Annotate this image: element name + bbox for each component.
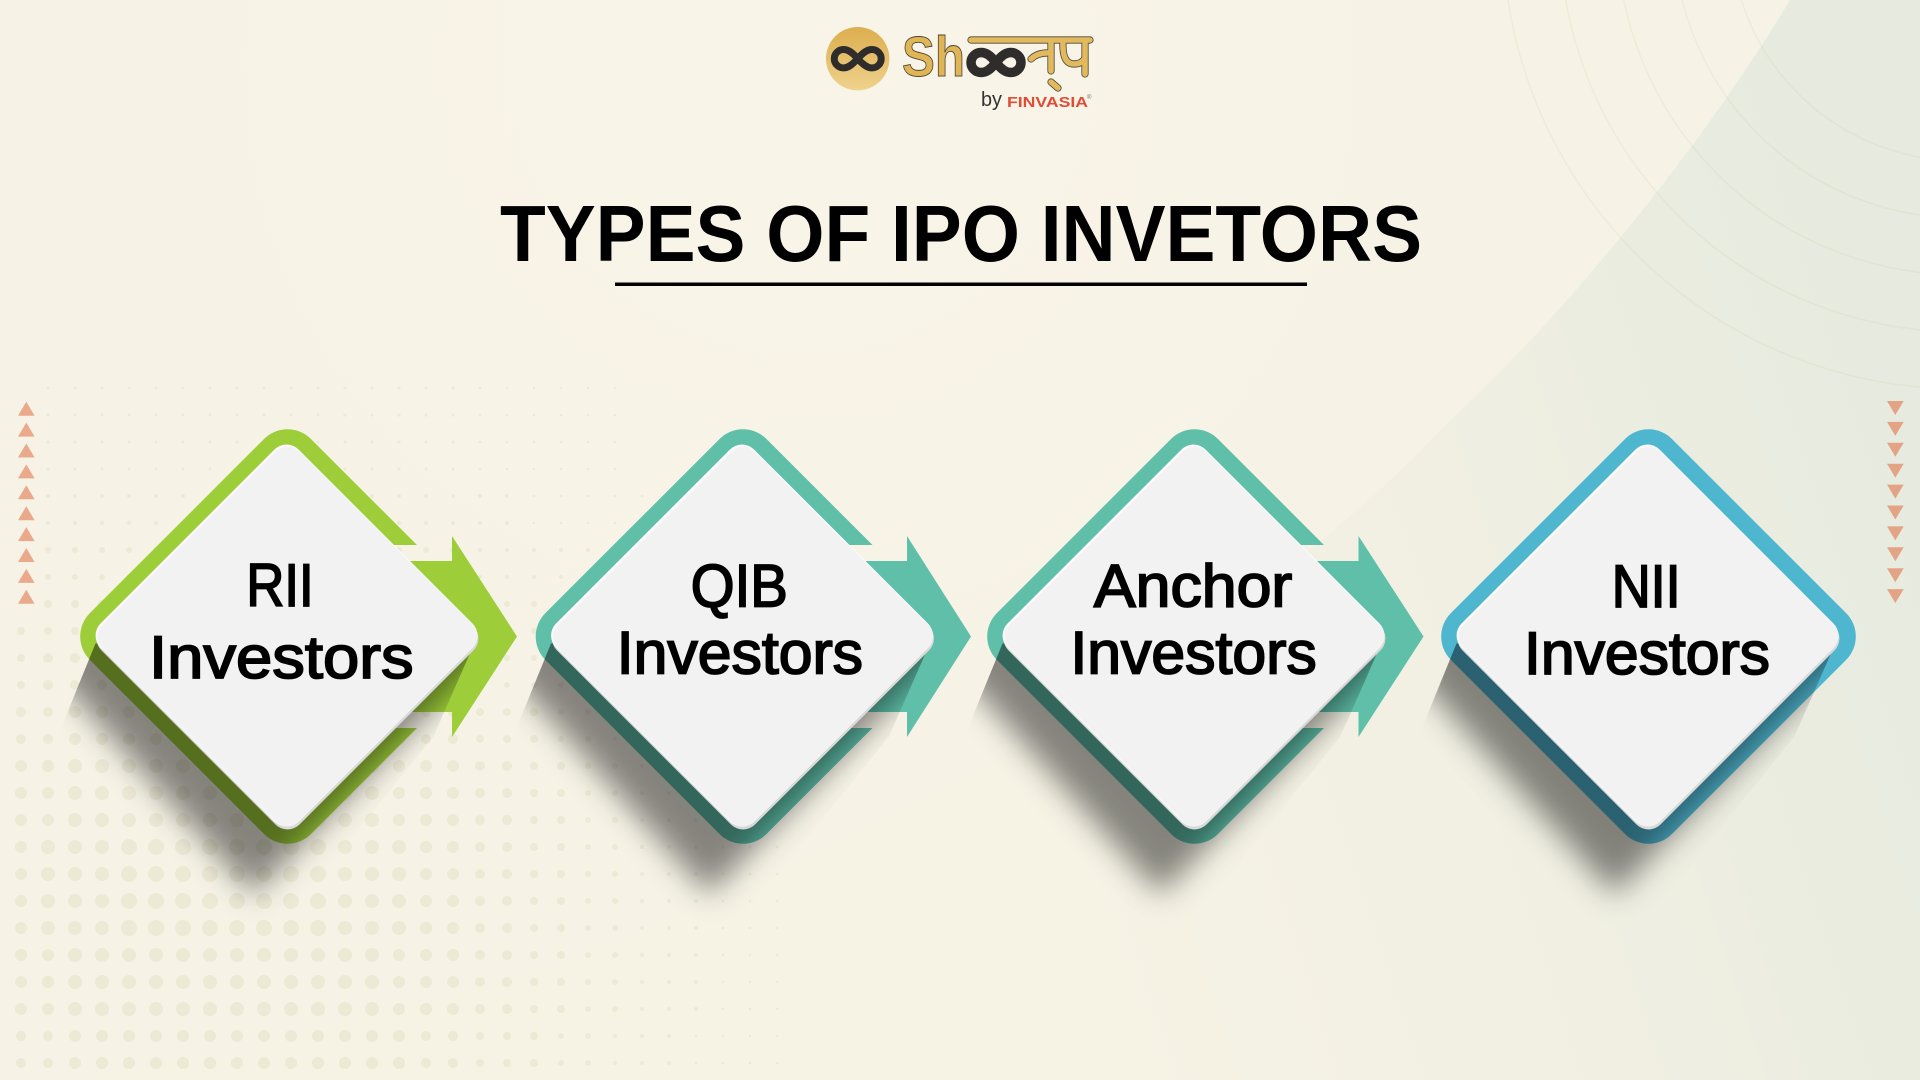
arrow: QIB to Anchor [843, 536, 971, 737]
icon: gold circle with infinity [826, 27, 889, 90]
ring [80, 429, 417, 844]
label: QIB: QIB [691, 552, 788, 620]
arrow: RII to QIB [388, 536, 517, 737]
shadow [66, 644, 470, 906]
label: Investors: Investors [1070, 620, 1317, 686]
panel: QIB investors [521, 429, 971, 906]
decorative up triangles [18, 402, 35, 604]
shadow [1426, 643, 1830, 906]
panel: RII investors [66, 429, 517, 906]
inner diamond [89, 438, 485, 836]
title: TYPES OF IPO INVETORS [500, 189, 1422, 278]
wordmark Sh: Sh [902, 25, 965, 89]
decorative down triangles [1887, 401, 1904, 603]
inner diamond [544, 438, 941, 836]
icon: wordmark infinity [971, 52, 1021, 72]
inner diamond [1450, 438, 1846, 836]
byline: by [981, 89, 1002, 111]
shadow [521, 644, 925, 906]
shadow [972, 644, 1376, 906]
ring [536, 429, 872, 844]
title underline [615, 282, 1307, 286]
logo: Shoonya by Finvasia [826, 25, 1092, 111]
label: Investors: Investors [617, 620, 863, 686]
label: RII: RII [246, 552, 314, 619]
label: Investors: Investors [1524, 620, 1770, 687]
arrow: Anchor to NII [1294, 536, 1424, 737]
registered mark: ® [1087, 94, 1092, 101]
halftone dot pattern [21, 388, 778, 1063]
panel: NII investors [1426, 429, 1856, 906]
icon: wordmark devanagari mark [971, 40, 1090, 88]
ring [1428, 416, 1869, 857]
label: NII: NII [1612, 553, 1681, 620]
panel: Anchor investors [972, 429, 1424, 906]
brand name: FINVASIA [1007, 95, 1089, 111]
inner diamond [996, 438, 1392, 836]
label: Anchor: Anchor [1094, 552, 1292, 620]
label: Investors: Investors [149, 624, 414, 691]
ring [987, 429, 1324, 844]
